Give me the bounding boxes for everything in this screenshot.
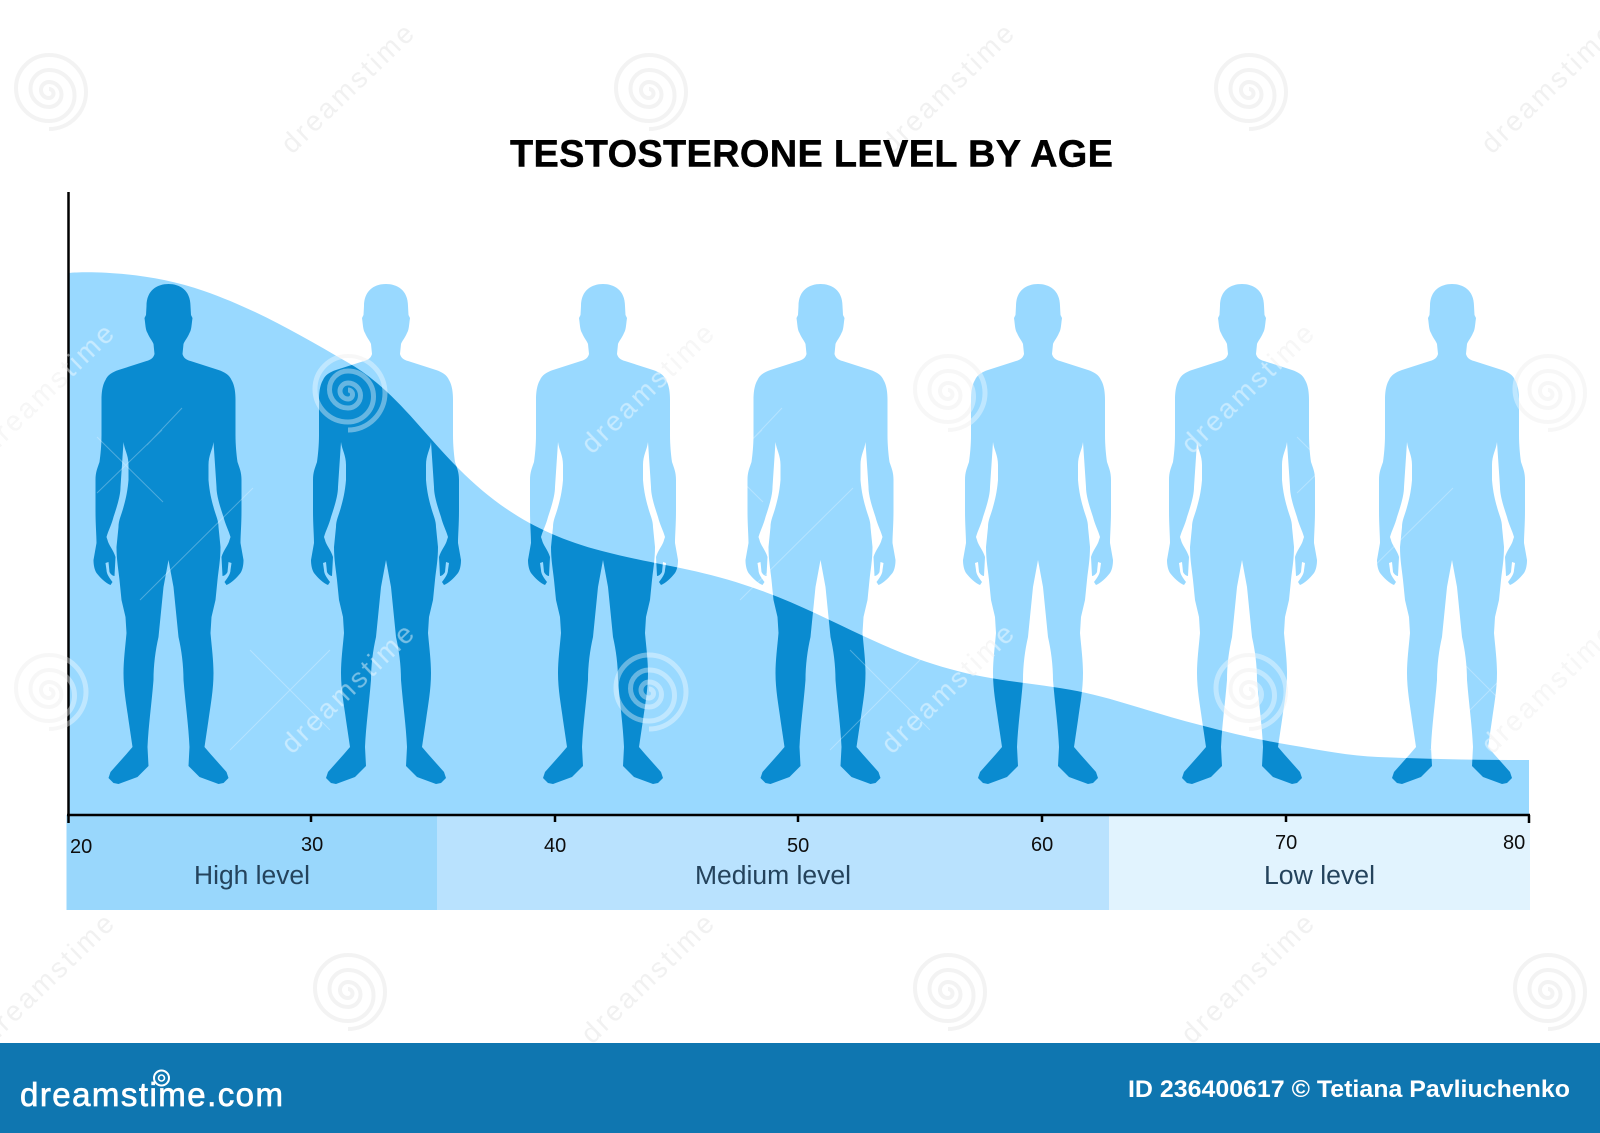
watermark: grey layer on white background: dreamstime: [275, 618, 420, 759]
level band: low: [1109, 815, 1530, 910]
area chart: testosterone level wave: [68, 272, 1529, 815]
figure: age 70: [1167, 284, 1317, 784]
watermark: grey layer on white background: dreamstime: [875, 18, 1020, 159]
age labels: 80: [1503, 832, 1525, 854]
level band: high: [66, 815, 437, 910]
age labels: 40: [544, 835, 566, 857]
title: TESTOSTERONE LEVEL BY AGE: [510, 134, 1113, 176]
image credit: ID 236400617 © Tetiana Pavliuchenko: [1128, 1076, 1570, 1103]
logo spiral icon: [154, 1070, 169, 1086]
age labels: 60: [1031, 834, 1053, 856]
watermark: grey layer on white background: dreamstime: [1175, 318, 1320, 459]
axes with ticks: [67, 192, 1530, 823]
level band: high: High level: [194, 862, 310, 890]
footer bar: [0, 1043, 1600, 1133]
age labels: 70: [1275, 832, 1297, 854]
watermark: white layer over chart: dreamstime: [575, 318, 720, 459]
figure: age 40: [528, 284, 678, 784]
figure: age 30: [311, 284, 461, 784]
logo text: dreamstime.com: [20, 1076, 283, 1113]
level band: medium: Medium level: [695, 862, 851, 890]
watermark: grey layer on white background: dreamstime: [575, 318, 720, 459]
watermark: white layer over chart: dreamstime: [275, 618, 420, 759]
figure: age 50: [746, 284, 896, 784]
figure: age 80: [1377, 284, 1527, 784]
figure: age 60: [963, 284, 1113, 784]
age labels: 20: [70, 836, 92, 858]
watermark: grey layer on white background: dreamstime: [275, 18, 420, 159]
level band: medium: [437, 815, 1109, 910]
watermark: grey layer on white background: dreamstime: [875, 618, 1020, 759]
age labels: [70, 832, 1525, 858]
age labels: 30: [301, 834, 323, 856]
figure: age 20: [94, 284, 244, 784]
watermark: white layer over chart: dreamstime: [1175, 318, 1320, 459]
watermark: grey layer on white background: dreamstime: [575, 908, 720, 1049]
age labels: 50: [787, 835, 809, 857]
watermark: grey layer on white background: dreamstime: [1175, 908, 1320, 1049]
level band: low: Low level: [1264, 862, 1375, 890]
watermark: white layer over chart: [0, 318, 1600, 759]
watermark: white layer over chart: dreamstime: [875, 618, 1020, 759]
